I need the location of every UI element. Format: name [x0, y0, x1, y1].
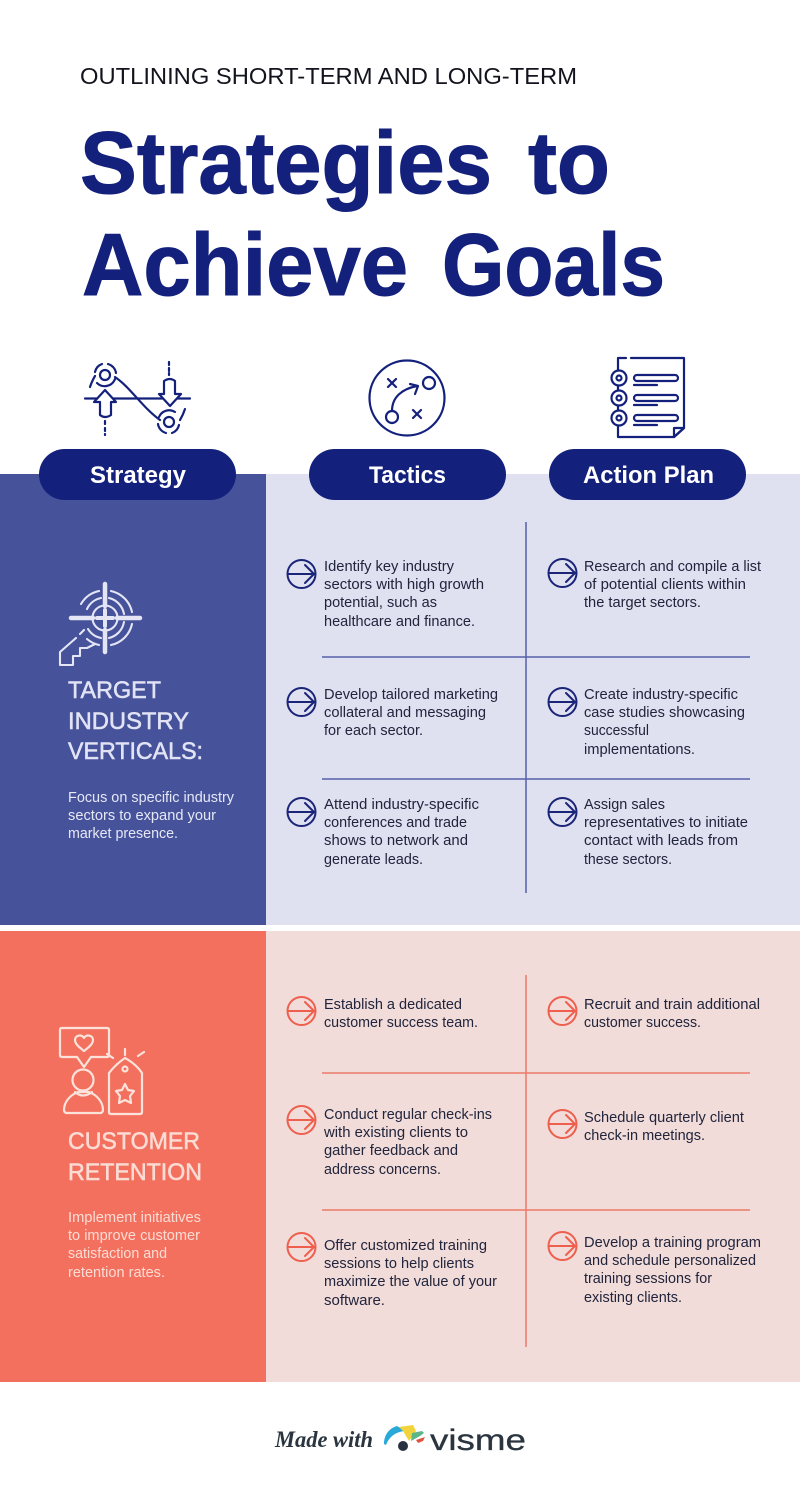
dividers: target industry grid — [322, 522, 750, 893]
button: Strategy — [39, 449, 236, 500]
icon: tactics — [370, 360, 444, 436]
item: tactic 3: shows to network and — [324, 833, 468, 849]
item: retention action 3 — [548, 1232, 761, 1306]
item: tactic 3: conferences and trade — [324, 815, 467, 831]
item: tactic 1: potential, such as — [324, 595, 437, 611]
item: retention action 2 — [548, 1110, 744, 1144]
footer: made with visme: visme — [430, 1424, 526, 1457]
item: action 1: of potential clients within — [584, 577, 746, 593]
item: retention tactic 2: address concerns. — [324, 1162, 441, 1178]
item: retention action 3: Develop a training program — [584, 1235, 761, 1251]
heading: target industry verticals: VERTICALS: — [68, 738, 203, 765]
item: retention tactic 2: Conduct regular check-ins — [324, 1107, 492, 1123]
text: customer retention description: to improve customer — [68, 1228, 200, 1244]
item: action 3: contact with leads from — [584, 833, 738, 849]
item: tactic 2: collateral and messaging — [324, 705, 486, 721]
button: Tactics: Tactics — [369, 462, 446, 489]
item: retention action 3: and schedule personalized — [584, 1253, 756, 1269]
icon: strategy — [85, 362, 190, 435]
item: retention tactic 2: gather feedback and — [324, 1143, 458, 1159]
text: customer retention description: retention rates. — [68, 1265, 165, 1281]
item: retention tactic 3: Offer customized training — [324, 1238, 487, 1254]
text: target industry description: Focus on specific industry — [68, 790, 235, 806]
item: retention action 1: Recruit and train additional — [584, 997, 760, 1013]
panel: customer retention tactics and action plan — [266, 931, 800, 1382]
heading: target industry verticals: INDUSTRY — [68, 708, 189, 735]
item: tactic 1: healthcare and finance. — [324, 614, 475, 630]
item: action 2: successful — [584, 723, 649, 739]
text: customer retention description — [68, 1210, 201, 1281]
item: tactic 2 — [288, 687, 498, 739]
item: retention action 1 — [548, 997, 760, 1031]
text: customer retention description: satisfaction and — [68, 1246, 167, 1262]
item: tactic 1 — [288, 559, 484, 630]
heading: customer retention: RETENTION — [68, 1159, 202, 1186]
item: retention tactic 2: with existing clients to — [323, 1125, 468, 1141]
icon: customer retention — [60, 1028, 144, 1114]
item: retention action 3: training sessions for — [584, 1271, 712, 1287]
icon: target key — [60, 584, 140, 665]
item: action 2: case studies showcasing — [584, 705, 745, 721]
logo: visme mark — [384, 1425, 425, 1451]
panel: target industry verticals strategy — [0, 474, 266, 925]
button: Action Plan — [549, 449, 746, 500]
heading: customer retention — [68, 1128, 202, 1186]
item: action 1: Research and compile a list — [584, 559, 761, 575]
panel: target industry verticals tactics and action plan — [266, 474, 800, 925]
item: retention tactic 3: maximize the value of your — [324, 1274, 497, 1290]
item: action 3: these sectors. — [584, 852, 672, 868]
item: retention tactic 3 — [288, 1233, 497, 1309]
item: retention action 3: existing clients. — [584, 1290, 682, 1306]
item: retention tactic 1 — [288, 997, 478, 1031]
item: tactic 3 — [288, 797, 479, 868]
footer: made with visme: Made with — [274, 1427, 373, 1452]
item: tactic 2: Develop tailored marketing — [324, 687, 498, 703]
item: retention tactic 2 — [288, 1106, 492, 1178]
item: retention tactic 1: Establish a dedicated — [324, 997, 462, 1013]
title: to — [528, 113, 610, 212]
item: action 2: Create industry-specific — [584, 687, 738, 703]
button: Tactics — [309, 449, 506, 500]
item: action 2: implementations. — [584, 742, 695, 758]
button: Action Plan: Action Plan — [583, 462, 714, 489]
item: action 1: the target sectors. — [584, 595, 701, 611]
item: retention action 2: check-in meetings. — [584, 1128, 705, 1144]
item: retention tactic 3: software. — [324, 1293, 385, 1309]
text: target industry description: market presence. — [68, 826, 178, 842]
title: Goals — [442, 215, 665, 314]
item: retention tactic 3: sessions to help clients — [324, 1256, 474, 1272]
title — [80, 113, 665, 314]
footer: made with visme — [274, 1424, 526, 1457]
text: target industry description: sectors to expand your — [68, 808, 216, 824]
heading: target industry verticals: TARGET — [68, 677, 161, 704]
text: customer retention description: Implement initiatives — [68, 1210, 201, 1226]
subtitle: OUTLINING SHORT-TERM AND LONG-TERM — [80, 63, 577, 89]
item: action 3: representatives to initiate — [584, 815, 748, 831]
button: Strategy: Strategy — [90, 462, 187, 489]
text: target industry description — [68, 790, 235, 842]
heading: target industry verticals — [68, 677, 203, 765]
heading: customer retention: CUSTOMER — [68, 1128, 200, 1155]
item: retention action 2: Schedule quarterly client — [584, 1110, 744, 1126]
dividers: customer retention grid — [322, 975, 750, 1347]
title: Achieve — [82, 215, 408, 314]
item: action 2 — [548, 687, 745, 758]
icon: action plan — [612, 358, 684, 437]
title: Strategies — [80, 113, 492, 212]
item: tactic 3: Attend industry-specific — [324, 797, 479, 813]
item: action 3: Assign sales — [584, 797, 665, 813]
item: retention action 1: customer success. — [584, 1015, 701, 1031]
item: tactic 3: generate leads. — [324, 852, 423, 868]
item: tactic 1: sectors with high growth — [324, 577, 484, 593]
item: tactic 2: for each sector. — [324, 723, 423, 739]
item: tactic 1: Identify key industry — [324, 559, 455, 575]
item: action 1 — [548, 559, 761, 611]
panel: customer retention strategy — [0, 931, 266, 1382]
item: action 3 — [548, 797, 748, 868]
item: retention tactic 1: customer success team. — [324, 1015, 478, 1031]
